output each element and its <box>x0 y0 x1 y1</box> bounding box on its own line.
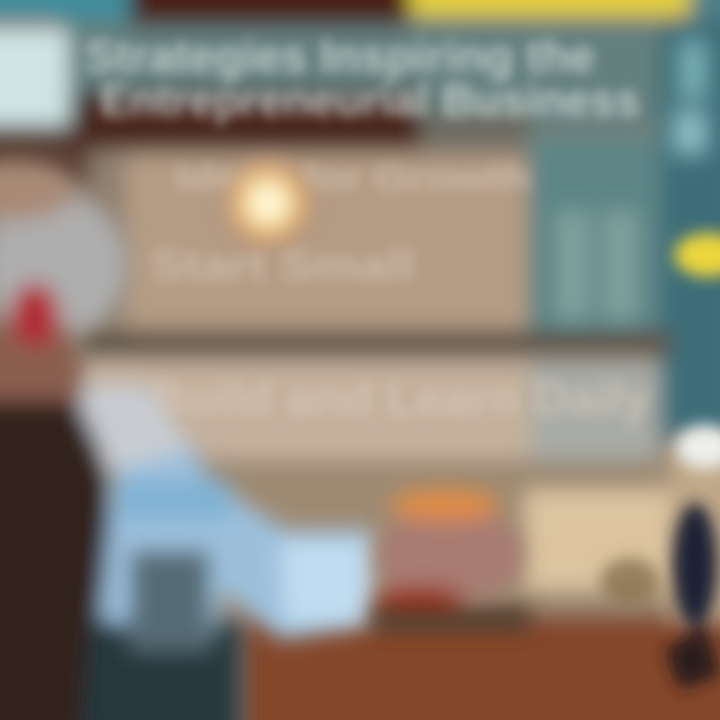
lamp glow <box>216 151 320 255</box>
headline text <box>85 30 640 126</box>
lower torso <box>80 620 240 720</box>
subheading text <box>150 157 530 290</box>
body text band: Build and Learn Daily <box>150 373 650 426</box>
dark jacket <box>0 400 112 720</box>
subheading text: Start Small <box>150 241 415 290</box>
ear <box>11 283 59 347</box>
man in foreground <box>0 160 372 720</box>
face <box>0 325 85 400</box>
hair <box>0 193 127 337</box>
background person <box>600 425 720 690</box>
shirt arm <box>90 385 372 640</box>
hand <box>370 489 530 630</box>
window panes <box>555 40 708 320</box>
yellow lamp right <box>674 233 720 277</box>
collar <box>70 385 190 470</box>
headline text: Strategies Inspiring the <box>85 30 595 82</box>
headline text: Entrepreneurial Business <box>100 74 640 126</box>
subheading text: Ideas for Growth <box>175 157 530 198</box>
